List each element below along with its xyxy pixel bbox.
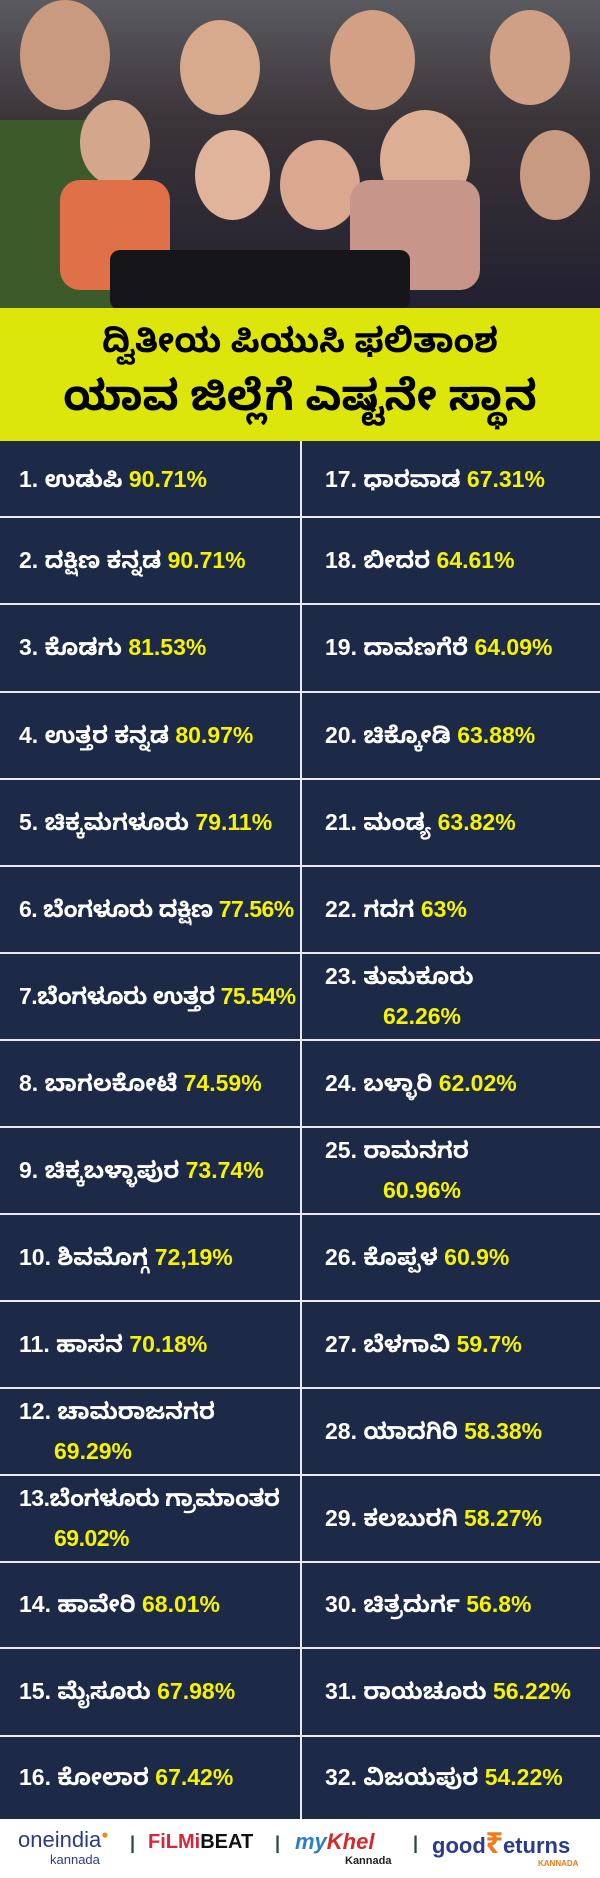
row 3 left: 3. ಕೊಡಗು 81.53% — [19, 634, 206, 660]
row 11 left: 11. ಹಾಸನ 70.18% — [19, 1330, 207, 1356]
row 11 right: 27. ಬೆಳಗಾವಿ 59.7% — [325, 1330, 522, 1356]
photo: celebrating students — [0, 0, 600, 308]
row 13 left: 13.ಬೆಂಗಳೂರು ಗ್ರಾಮಾಂತರ — [19, 1484, 279, 1510]
row 1 right: 17. ಧಾರವಾಡ 67.31% — [325, 466, 545, 492]
row 3 right: 19. ದಾವಣಗೆರೆ 64.09% — [325, 634, 552, 660]
row 5 left: 5. ಚಿಕ್ಕಮಗಳೂರು 79.11% — [19, 808, 272, 834]
row 9 right — [325, 1136, 469, 1202]
footer: logos: | — [130, 1833, 135, 1853]
row 12 left: 69.29% — [54, 1438, 132, 1464]
row 13 left — [19, 1484, 280, 1550]
row 10 right: 26. ಕೊಪ್ಪಳ 60.9% — [325, 1244, 509, 1270]
row 13 left: 69.02% — [54, 1524, 129, 1550]
row 9 right: 25. ರಾಮನಗರ — [325, 1136, 469, 1162]
row 7 left: 7.ಬೆಂಗಳೂರು ಉತ್ತರ 75.54% — [19, 982, 296, 1008]
footer: logos — [0, 1819, 600, 1878]
row 15 left: 15. ಮೈಸೂರು 67.98% — [19, 1678, 235, 1704]
row 12 right: 28. ಯಾದಗಿರಿ 58.38% — [325, 1418, 542, 1444]
row 13 right: 29. ಕಲಬುರಗಿ 58.27% — [325, 1504, 542, 1530]
table: district ranking — [0, 441, 600, 1819]
row 2 left: 2. ದಕ್ಷಿಣ ಕನ್ನಡ 90.71% — [19, 546, 246, 572]
row 15 right: 31. ರಾಯಚೂರು 56.22% — [325, 1678, 571, 1704]
row 2 right: 18. ಬೀದರ 64.61% — [325, 546, 515, 572]
row 7 right: 62.26% — [383, 1002, 461, 1028]
row 14 left: 14. ಹಾವೇರಿ 68.01% — [19, 1591, 220, 1617]
logo oneindia: oneindia● — [18, 1827, 108, 1852]
row 1 left: 1. ಉಡುಪಿ 90.71% — [19, 466, 207, 492]
row 4 right: 20. ಚಿಕ್ಕೋಡಿ 63.88% — [325, 722, 535, 748]
row 9 right: 60.96% — [383, 1176, 461, 1202]
row 8 right: 24. ಬಳ್ಳಾರಿ 62.02% — [325, 1070, 517, 1096]
row 10 left: 10. ಶಿವಮೊಗ್ಗ 72,19% — [19, 1244, 233, 1270]
footer: logos: kannada — [50, 1852, 100, 1867]
row 12 left: 12. ಚಾಮರಾಜನಗರ — [19, 1398, 215, 1424]
row 9 left: 9. ಚಿಕ್ಕಬಳ್ಳಾಪುರ 73.74% — [19, 1156, 264, 1182]
title line 2: ಯಾವ ಜಿಲ್ಲೆಗೆ ಎಷ್ಟನೇ ಸ್ಥಾನ — [63, 372, 537, 419]
row 6 right: 22. ಗದಗ 63% — [325, 896, 467, 922]
row 12 left — [19, 1398, 215, 1464]
footer: logos: KANNADA — [538, 1859, 578, 1868]
footer: logos: Kannada — [345, 1855, 391, 1867]
row 14 right: 30. ಚಿತ್ರದುರ್ಗ 56.8% — [325, 1591, 531, 1617]
logo mykhel: myKhel — [295, 1829, 374, 1854]
row 6 left: 6. ಬೆಂಗಳೂರು ದಕ್ಷಿಣ 77.56% — [19, 896, 294, 922]
logo goodreturns: good₹eturns — [432, 1827, 570, 1860]
row 16 right: 32. ವಿಜಯಪುರ 54.22% — [325, 1764, 563, 1790]
footer: logos: | — [413, 1833, 418, 1853]
row 16 left: 16. ಕೋಲಾರ 67.42% — [19, 1764, 233, 1790]
row 7 right — [325, 962, 474, 1028]
header: title — [0, 308, 600, 441]
logo filmibeat: FiLMiBEAT — [148, 1831, 253, 1853]
footer: logos: | — [275, 1833, 280, 1853]
row 8 left: 8. ಬಾಗಲಕೋಟೆ 74.59% — [19, 1070, 262, 1096]
row 5 right: 21. ಮಂಡ್ಯ 63.82% — [325, 808, 516, 834]
row 4 left: 4. ಉತ್ತರ ಕನ್ನಡ 80.97% — [19, 722, 253, 748]
title line 1: ದ್ವಿತೀಯ ಪಿಯುಸಿ ಫಲಿತಾಂಶ — [102, 322, 498, 360]
row 7 right: 23. ತುಮಕೂರು — [325, 962, 474, 988]
